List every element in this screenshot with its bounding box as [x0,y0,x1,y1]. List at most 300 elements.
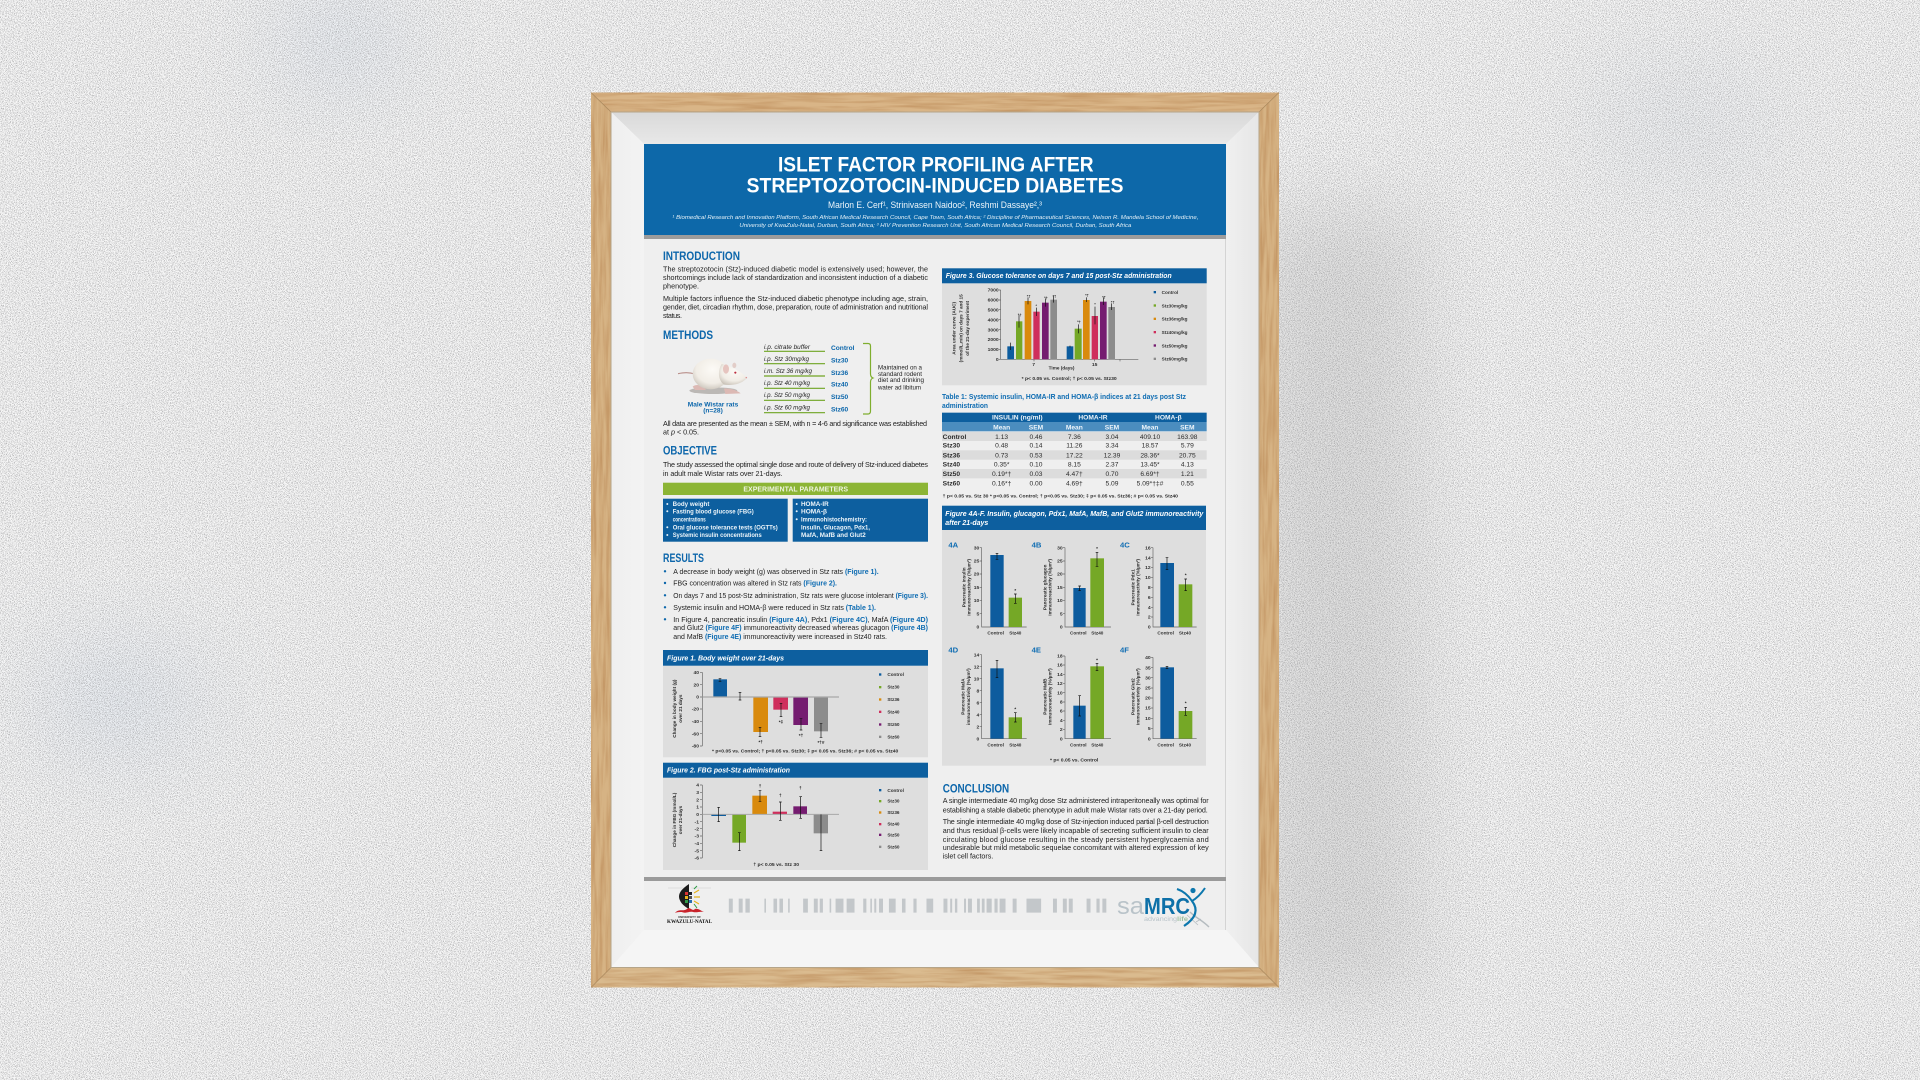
bar chart: FBG: -1 [695,819,699,825]
diagram: dosing groups: i.p. citrate buffer [764,344,811,351]
table 1: 4.69† [1066,480,1083,487]
panel: figure 2 FBG: Figure 2. FBG post-Stz administration [667,768,790,775]
bar chart: body weight: over 21 days [678,694,683,723]
table 1: Mean [1066,424,1083,431]
panel: figure 3 glucose tolerance: Figure 3. Glucose tolerance on days 7 and 15 post-Stz administration [946,273,1172,280]
chart 4B: 25 [1057,559,1063,565]
parameter box: right: Immunohistochemistry: [801,518,867,524]
parameter box: left: Oral glucose tolerance tests (OGTTs) [673,526,778,532]
bar chart: body weight: Stz30 [887,685,900,690]
chart 4B: 5 [1060,611,1063,617]
parameter box: left [663,499,788,542]
bar chart: body weight: Change in body weight (g) [672,679,677,738]
text: conclusion: A single intermediate 40 mg/kg dose Stz administered intraperitoneally was optimal for [943,796,1209,805]
table 1: 0.73 [995,452,1008,459]
table 1: INSULIN (ng/ml) [992,415,1043,422]
chart 4D: * [1014,706,1016,711]
text: conclusion [943,796,1209,860]
chart 4E: 14 [1057,672,1063,678]
chart 4F: 4F [1120,645,1129,654]
chart 4F: 40 [1145,655,1151,661]
chart 4E: 4E [1032,645,1041,654]
chart 4C: * [1185,573,1187,578]
chart 4A: immunoreactivity (%/µm²) [966,559,971,616]
bar chart: body weight: Stz40 [887,709,900,714]
bar chart: AUC: *† [1102,294,1106,299]
bar chart: body weight: 40 [693,670,699,676]
chart 4E: 4 [1060,718,1063,724]
table 1: 3.34 [1106,443,1119,450]
parameter box: right: Insulin, Glucagon, Pdx1, [801,526,870,532]
list: results: FBG concentration was altered in Stz rats (Figure 2). [673,578,837,588]
table 1: Stz40 [943,461,960,468]
diagram: dosing groups: diet and drinking [878,377,925,384]
bar chart: AUC: Stz30mg/kg [1162,303,1188,308]
bar chart: AUC: of the 21-day experiment [965,300,970,356]
text: objective: in adult male Wistar rats over 21-days. [663,469,782,478]
text: objective [663,460,928,478]
wooden frame [591,92,1279,988]
logo: University of KwaZulu-Natal: KWAZULU-NATAL [667,920,712,925]
chart 4F: 10 [1145,716,1151,722]
table 1: 18.57 [1142,443,1159,450]
bar chart: body weight: -20 [692,707,699,713]
chart 4B: 10 [1057,598,1063,604]
chart 4A: 20 [974,572,980,578]
table 1: HOMA-IR [1078,415,1108,422]
panel: figure 1 body weight: Figure 1. Body weight over 21-days [667,655,784,662]
chart 4A: * [1014,588,1016,593]
table 1: 0.46 [1030,434,1043,441]
chart 4A: 0 [977,625,980,631]
bar chart: FBG: -2 [695,826,699,832]
bar chart: AUC: Stz50mg/kg [1162,343,1188,348]
chart 4D: 8 [977,688,980,694]
table 1: 3.04 [1106,434,1119,441]
chart 4C: 6 [1148,595,1151,601]
table 1: 0.00 [1030,480,1043,487]
bar chart: FBG: 2 [696,797,699,803]
parameter box: left: concentrations [673,518,706,524]
chart 4E: 16 [1057,663,1063,669]
affiliations [672,215,1198,229]
chart 4D: Pancreatic MafA [961,678,966,715]
parameter box: right: MafA, MafB and Glut2 [801,533,866,539]
table 1: 0.14 [1030,443,1043,450]
table 1: 0.10 [1030,461,1043,468]
bar chart: AUC: 6000 [988,298,999,304]
bar chart: body weight: -40 [692,719,699,725]
table 1: 0.70 [1106,471,1119,478]
logo: saMRC: advancing [1144,917,1177,923]
bar chart: body weight: Stz60 [887,734,900,739]
table 1: 0.03 [1030,471,1043,478]
bar chart: body weight: 0 [696,695,699,701]
icon: white rat [678,359,747,394]
bar chart: FBG: Stz40 [887,822,900,827]
table 1: 1.13 [995,434,1008,441]
list: results: A decrease in body weight (g) was observed in Stz rats (Figure 1). [673,567,879,576]
table 1: 4.47† [1066,471,1083,478]
diagram: dosing groups: i.p. Stz 60 mg/kg [764,405,810,412]
heading: objective: OBJECTIVE [663,444,717,458]
bar chart: AUC: 7 [1032,362,1035,368]
bar chart: FBG: 1 [696,805,699,811]
table 1: 13.45* [1140,461,1160,468]
list: results: Systemic insulin and HOMA-β were reduced in Stz rats (Table 1). [673,603,876,612]
chart 4C: 12 [1145,565,1151,571]
chart 4E: Control [1070,742,1087,747]
table 1: 11.26 [1066,443,1083,450]
footer bar [644,877,1226,881]
chart 4B: immunoreactivity (%/µm²) [1048,559,1053,616]
panel: figure 4 immunoreactivity: Figure 4A-F. Insulin, glucagon, Pdx1, MafA, MafB, and Glut2 immunoreactivity [945,511,1204,518]
bar chart: FBG: Change in FBG (mmol/L) [672,792,677,847]
bar chart: AUC: 4000 [988,317,999,323]
diagram: dosing groups: i.m. Stz 36 mg/kg [764,368,812,375]
bar chart: AUC: Time (days) [1049,365,1075,370]
diagram: dosing groups [764,344,925,414]
chart 4C: immunoreactivity (%/µm²) [1135,559,1140,616]
chart 4B [1032,541,1111,636]
table 1: SEM [1105,424,1120,431]
logo: saMRC: MRC [1144,893,1190,919]
chart 4C: 4 [1148,605,1151,611]
chart 4D: 10 [974,676,980,682]
chart 4C: Pancreatic Pdx1 [1130,569,1135,605]
heading: introduction: INTRODUCTION [663,249,740,263]
bar chart: body weight: 20 [693,682,699,688]
chart 4C: 4C [1120,541,1130,550]
caption: male wistar rats: (n=28) [703,408,723,415]
text: introduction: Multiple factors influence the Stz-induced diabetic phenotype including age, strain, [663,294,928,303]
table 1: 28.36* [1140,452,1160,459]
table 1: Mean [993,424,1010,431]
chart 4E [1032,645,1111,747]
table 1: 0.19*† [992,471,1012,478]
panel: figure 4 immunoreactivity [942,506,1206,766]
table title: Table 1: Systemic insulin, HOMA-IR and HOMA-β indices at 21 days post Stz [942,392,1186,401]
table 1: 5.09 [1106,480,1119,487]
panel: experimental parameters: EXPERIMENTAL PARAMETERS [743,486,848,493]
chart 4C: Control [1157,631,1174,636]
table 1: HOMA-β [1155,415,1182,422]
chart 4B: Pancreatic glucagon [1043,564,1048,610]
table title [942,392,1186,410]
heading: conclusion: CONCLUSION [943,781,1009,795]
table 1: Control [943,434,966,441]
bar chart: AUC: *† [1027,294,1031,299]
bar chart: AUC: *† [1052,293,1056,298]
chart 4D: Stz40 [1009,742,1022,747]
diagram: dosing groups: Stz30 [831,357,849,364]
bar chart: AUC: (mmol/L.min) on days 7 and 15 [958,294,963,362]
chart 4F: * [1185,700,1187,705]
bar chart: body weight: -60 [692,731,699,737]
bar chart: FBG: † [799,786,802,791]
parameter box: right: HOMA-IR [801,502,829,508]
chart 4D [948,645,1027,747]
chart 4D: Control [987,742,1004,747]
chart 4E: * [1096,658,1098,663]
logo: saMRC [1117,888,1209,927]
chart 4B: 0 [1060,625,1063,631]
chart 4F: Pancreatic Glut2 [1130,678,1135,715]
table 1: 163.98 [1177,434,1198,441]
table 1: 409.10 [1140,434,1160,441]
table 1: 4.13 [1181,461,1194,468]
chart 4A: 30 [974,545,980,551]
bar chart: FBG: Stz30 [887,799,900,804]
chart 4B: Control [1070,631,1087,636]
table 1: 2.37 [1106,461,1119,468]
table 1: † p< 0.05 vs. Stz 30 * p<0.05 vs. Control; † p<0.05 vs. Stz30; ‡ p< 0.05 vs. Stz36; # p< 0.05 vs. Stz40 [943,494,1178,499]
panel: figure 2 FBG [663,763,928,870]
title: ISLET FACTOR PROFILING AFTER [778,154,1094,177]
diagram: dosing groups: Stz36 [831,370,849,377]
table 1: 5.09*†‡# [1137,480,1164,487]
chart 4E: Pancreatic MafB [1043,678,1048,715]
text: introduction: status. [663,311,682,320]
bar chart: AUC: 7000 [988,288,999,294]
heading: methods: METHODS [663,328,713,342]
table 1: 17.22 [1066,452,1083,459]
diagram: dosing groups: standard rodent [878,371,922,378]
chart 4D: 12 [974,664,980,670]
chart 4B: 4B [1032,541,1042,550]
parameter box: left: Fasting blood glucose (FBG) [673,510,754,516]
bar chart: FBG: -3 [695,834,699,840]
bar chart: body weight: *†# [817,740,825,745]
chart 4F: 15 [1145,706,1151,712]
chart 4F: 20 [1145,696,1151,702]
text: introduction: phenotype. [663,282,699,290]
text: conclusion: circulating blood glucose resulting in the steady persistent hyperglycaemia and [943,835,1209,844]
chart 4A: 10 [974,598,980,604]
bar chart: body weight [672,670,904,754]
list: results: and Glut2 (Figure 4F) immunoreactivity decreased whereas glucagon (Figure 4B) [673,623,929,632]
chart 4C: 8 [1148,585,1151,591]
diagram: dosing groups: Stz60 [831,407,849,414]
diagram: dosing groups: Stz50 [831,394,849,401]
bar chart: FBG [672,783,904,867]
bar chart: FBG: Stz60 [887,844,900,849]
bar chart: FBG: † [779,793,782,798]
chart 4E: 10 [1057,690,1063,696]
bar chart: AUC: Area under curve (AUC) [952,301,957,355]
diagram: dosing groups: i.p. Stz 50 mg/kg [764,392,810,399]
list: results [664,567,929,641]
chart 4E: 0 [1060,736,1063,742]
chart 4D: 14 [974,652,980,658]
chart 4B: 20 [1057,572,1063,578]
table 1: Stz30 [943,443,960,450]
text: conclusion: establishing a stable diabetic phenotype in adult male Wistar rats over a 21-day period. [943,806,1208,814]
bar chart: AUC: *† [1018,312,1022,317]
text: conclusion: and thus residual β-cells were likely incapable of secreting sufficient insulin to clear [943,826,1209,835]
table 1: 8.15 [1068,461,1081,468]
chart 4E: 2 [1060,727,1063,733]
chart 4F [1120,645,1197,747]
bar chart: body weight: Stz36 [887,697,900,702]
panel: figure 4 immunoreactivity: after 21-days [945,520,988,527]
panel: figure 3 glucose tolerance [942,268,1207,385]
bar chart: body weight: *‡ [779,719,784,724]
chart 4A: Pancreatic insulin [961,567,966,607]
chart 4D: 6 [977,700,980,706]
chart 4F: 5 [1148,726,1151,732]
chart 4F: 25 [1145,686,1151,692]
table 1: 12.39 [1104,452,1121,459]
affiliations: University of KwaZulu-Natal, Durban, South Africa; ³ HIV Prevention Research Unit, South African Medical Research Council, Durban, South Africa [739,223,1131,229]
table 1: Stz50 [943,471,960,478]
heading: results: RESULTS [663,551,704,565]
diagram: dosing groups: Maintained on a [878,364,923,372]
bar chart: AUC: 2000 [988,337,999,343]
chart 4B: * [1096,546,1098,551]
table 1: 0.16*† [992,480,1012,487]
figure 4 footnote: * p< 0.05 vs. Control [1050,757,1098,762]
table 1: 1.21 [1181,471,1194,478]
bar chart: AUC: *† [1085,293,1089,298]
chart 4F: 35 [1145,665,1151,671]
text: conclusion: islet cell factors. [943,852,993,860]
chart 4C: 14 [1145,555,1151,561]
logo: University of KwaZulu-Natal [667,884,712,925]
bar chart: FBG: 0 [696,812,699,818]
chart 4D: 2 [977,724,980,730]
bar chart: AUC: * p< 0.05 vs. Control; † p< 0.05 vs. Stz30 [1022,376,1117,381]
bar chart: body weight: Control [887,672,904,677]
chart 4A: 25 [974,559,980,565]
chart 4B: 15 [1057,585,1063,591]
bar chart: AUC [952,288,1188,381]
chart 4A: Stz40 [1009,631,1022,636]
chart 4F: Control [1157,742,1174,747]
title [746,154,1124,198]
table title: administration [942,401,988,410]
chart 4D: immunoreactivity (%/µm²) [966,668,971,725]
panel: figure 1 body weight [663,650,928,757]
list: results: and MafB (Figure 4E) immunoreactivity were increased in Stz40 rats. [673,632,887,641]
bar chart: FBG: Control [887,788,904,793]
logo: saMRC: life [1177,917,1189,923]
chart 4A [948,541,1027,636]
chart 4E: 6 [1060,709,1063,715]
chart 4A: 4A [948,541,959,550]
text: statistics [663,419,927,436]
text: introduction: shortcomings include lack of standardization and inconsistent induction of a diabetic [663,273,928,282]
diagram: dosing groups: i.p. Stz 30mg/kg [764,356,809,363]
parameter box: right [793,499,928,542]
chart 4E: immunoreactivity (%/µm²) [1048,668,1053,725]
logo: saMRC: sa [1117,893,1145,920]
table 1: 5.79 [1181,443,1194,450]
chart 4E: Stz40 [1091,742,1104,747]
bar chart: AUC: 3000 [988,327,999,333]
chart 4C: 2 [1148,615,1151,621]
chart 4C [1120,541,1197,636]
table 1: SEM [1180,424,1195,431]
bar chart: FBG: over 21-days [678,805,683,834]
chart 4A: Control [987,631,1004,636]
affiliations: ¹ Biomedical Research and Innovation Platform, South African Medical Research Council, Cape Town, South Africa; ² Discipline of Pharmaceutical Sciences, Nelson R. Mandela School of Medicine, [672,215,1198,221]
table 1: 0.55 [1181,480,1194,487]
table 1: 0.53 [1030,452,1043,459]
bar chart: body weight: *† [758,740,763,745]
text: introduction: gender, diet, circadian rhythm, dose, preparation, route of administration and nutritional [663,303,928,312]
caption: male wistar rats: Male Wistar rats [688,401,739,408]
table 1: Stz60 [943,480,960,487]
table 1: Stz36 [943,452,960,459]
bar chart: AUC: 15 [1092,362,1098,368]
text: introduction: The streptozotocin (Stz)-induced diabetic model is extensively used; however, the [663,264,928,274]
table 1: 0.35* [994,461,1010,468]
table 1: 7.36 [1068,434,1081,441]
text: introduction [663,264,928,320]
bar chart: AUC: 5000 [988,307,999,313]
diagram: dosing groups: Control [831,345,855,352]
table 1: SEM [1029,424,1044,431]
chart 4B: 30 [1057,545,1063,551]
table 1 [942,413,1207,499]
chart 4C: Stz40 [1179,631,1191,636]
chart 4F: immunoreactivity (%/µm²) [1135,668,1140,725]
bar chart: FBG: Stz50 [887,832,900,837]
chart 4A: 5 [977,611,980,617]
chart 4B: Stz40 [1091,631,1104,636]
chart 4F: 0 [1148,736,1151,742]
chart 4C: 10 [1145,575,1151,581]
bar chart: AUC: Stz36mg/kg [1162,317,1188,322]
bar chart: AUC: *† [1077,319,1081,324]
text: conclusion: The single intermediate 40 mg/kg dose of Stz-injection induced partial β-cell destruction [943,817,1209,826]
frame shadow [1250,210,1420,1000]
bar chart: FBG: Stz36 [887,810,900,815]
bar chart: AUC: Control [1162,290,1178,295]
parameter box: right: HOMA-β [801,510,827,516]
list: results: On days 7 and 15 post-Stz administration, Stz rats were glucose intolerant (Figure 3). [673,591,928,600]
chart 4F: 30 [1145,675,1151,681]
bar chart: AUC: *† [1111,299,1115,304]
bar chart: FBG: † [759,783,762,788]
bar chart: AUC: Stz40mg/kg [1162,330,1188,335]
diagram: dosing groups: i.p. Stz 40 mg/kg [764,380,810,387]
table 1: 20.75 [1179,452,1196,459]
table 1: Mean [1141,424,1159,431]
bar chart: body weight: -80 [692,744,699,750]
caption: male wistar rats [688,401,739,415]
bar chart: AUC: 1000 [988,347,999,353]
panel: experimental parameters [663,483,928,542]
chart 4D: 0 [977,736,980,742]
chart 4E: 12 [1057,681,1063,687]
bar chart: FBG: 3 [696,790,699,796]
bar chart: body weight: * p<0.05 vs. Control; † p<0.05 vs. Stz30; ‡ p< 0.05 vs. Stz36; # p< 0.05 vs. Stz40 [712,749,899,754]
bar chart: AUC: * [1094,301,1096,306]
chart 4A: 15 [974,585,980,591]
chart 4E: 8 [1060,700,1063,706]
bar chart: AUC: 0 [996,357,999,363]
table 1: 6.69*† [1140,471,1160,478]
bar chart: FBG: 4 [696,783,699,789]
chart 4D: 4 [977,712,980,718]
bar chart: FBG: -5 [695,848,699,854]
chart 4F: Stz40 [1179,742,1191,747]
text: objective: The study assessed the optimal single dose and route of delivery of Stz-induced diabetes [663,460,928,469]
poster header banner [644,144,1226,239]
bar chart: AUC: Stz60mg/kg [1162,357,1188,362]
